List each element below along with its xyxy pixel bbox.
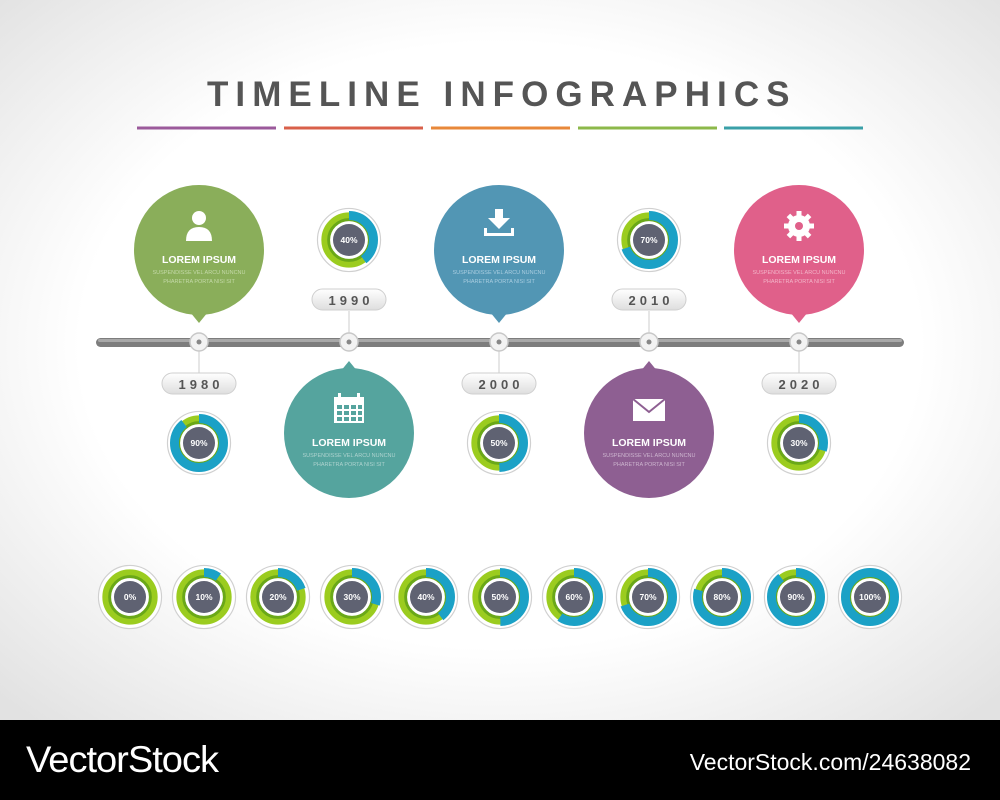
timeline donuts bbox=[167, 208, 831, 475]
bubble: 1980 green: PHARETRA PORTA NISI SIT bbox=[163, 279, 235, 285]
timeline donuts: 90% bbox=[190, 438, 208, 448]
icon: person bbox=[186, 211, 212, 241]
timeline donuts: 50% bbox=[490, 438, 508, 448]
year pills: 1980 bbox=[179, 377, 223, 392]
bubble: 1980 green bbox=[134, 185, 264, 323]
year pills bbox=[162, 289, 836, 394]
bubble: 1980 green: SUSPENDISSE VEL ARCU NUNCNU bbox=[152, 270, 246, 276]
bubble: 2000 blue: LOREM IPSUM bbox=[462, 254, 536, 266]
bubble: 1990 teal: PHARETRA PORTA NISI SIT bbox=[313, 462, 385, 468]
bubble: 2000 blue bbox=[434, 185, 564, 323]
bottom donut row: 90% bbox=[787, 592, 805, 602]
bubble: 2010 purple: SUSPENDISSE VEL ARCU NUNCNU bbox=[602, 453, 696, 459]
bubble: 2020 pink: SUSPENDISSE VEL ARCU NUNCNU bbox=[752, 270, 846, 276]
bubble: 1980 green: LOREM IPSUM bbox=[162, 254, 236, 266]
icon: envelope bbox=[633, 399, 665, 421]
title underlines bbox=[137, 126, 863, 130]
footer bar: VectorStock.com/24638082 bbox=[690, 749, 971, 775]
year pills: 2020 bbox=[779, 377, 823, 392]
bubble: 2020 pink: LOREM IPSUM bbox=[762, 254, 836, 266]
bottom donut row: 70% bbox=[639, 592, 657, 602]
bottom donut row: 100% bbox=[859, 592, 881, 602]
bubble: 2010 purple: PHARETRA PORTA NISI SIT bbox=[613, 462, 685, 468]
bubble: 2000 blue: PHARETRA PORTA NISI SIT bbox=[463, 279, 535, 285]
bubble: 2020 pink: PHARETRA PORTA NISI SIT bbox=[763, 279, 835, 285]
bubble: 1990 teal bbox=[284, 361, 414, 498]
bottom donut row: 30% bbox=[343, 592, 361, 602]
year pills: 1990 bbox=[329, 293, 373, 308]
bottom donut row: 0% bbox=[124, 592, 137, 602]
bottom donut row: 60% bbox=[565, 592, 583, 602]
title: TIMELINE INFOGRAPHICS bbox=[207, 75, 795, 114]
bubble: 2010 purple bbox=[584, 361, 714, 498]
bottom donut row: 10% bbox=[195, 592, 213, 602]
timeline donuts: 70% bbox=[640, 235, 658, 245]
bubble: 2020 pink bbox=[734, 185, 864, 323]
bottom donut row: 40% bbox=[417, 592, 435, 602]
bottom donut row bbox=[98, 565, 902, 629]
bubble: 1990 teal: LOREM IPSUM bbox=[312, 437, 386, 449]
icon: download bbox=[484, 209, 514, 236]
bubble: 2010 purple: LOREM IPSUM bbox=[612, 437, 686, 449]
bubble: 1990 teal: SUSPENDISSE VEL ARCU NUNCNU bbox=[302, 453, 396, 459]
bottom donut row: 80% bbox=[713, 592, 731, 602]
bottom donut row: 20% bbox=[269, 592, 287, 602]
icon: calendar bbox=[334, 393, 364, 423]
bubble: 2000 blue: SUSPENDISSE VEL ARCU NUNCNU bbox=[452, 270, 546, 276]
timeline donuts: 40% bbox=[340, 235, 358, 245]
bottom donut row: 50% bbox=[491, 592, 509, 602]
timeline donuts: 30% bbox=[790, 438, 808, 448]
icon: gear bbox=[784, 211, 814, 241]
timeline axis bbox=[96, 311, 904, 373]
year pills: 2000 bbox=[479, 377, 523, 392]
year pills: 2010 bbox=[629, 293, 673, 308]
footer bar bbox=[0, 720, 1000, 800]
footer bar: VectorStock bbox=[26, 739, 220, 780]
